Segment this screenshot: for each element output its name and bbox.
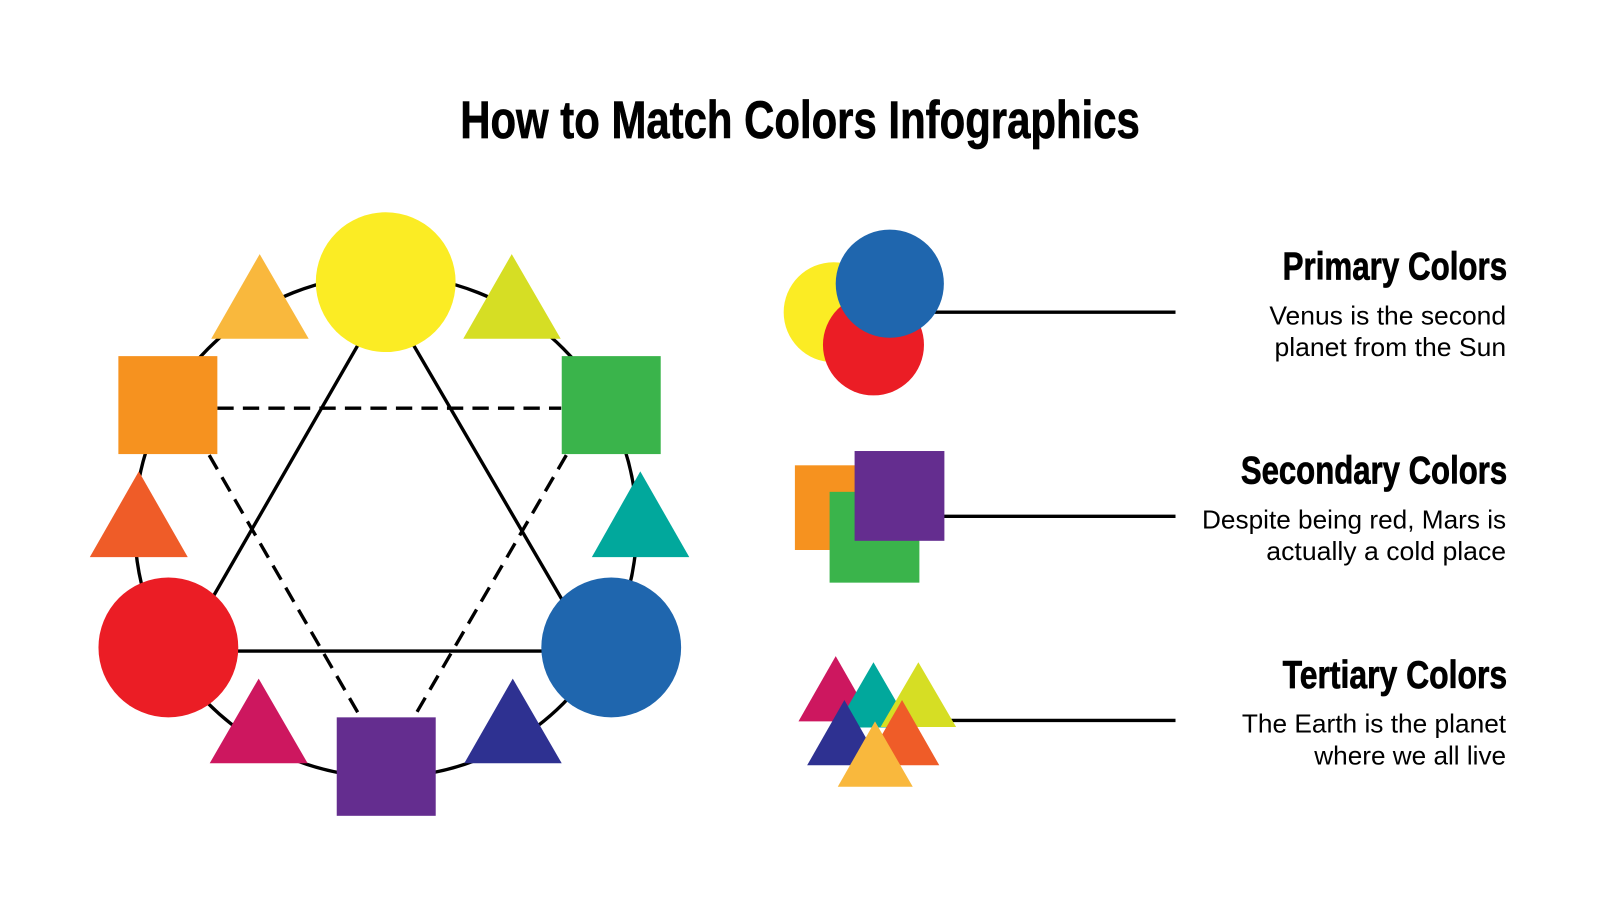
solid lines — [211, 343, 562, 651]
connector line — [939, 515, 1176, 518]
blue circle — [541, 578, 681, 717]
red circle — [98, 578, 238, 717]
navy triangle — [464, 679, 562, 763]
purple square — [337, 717, 436, 816]
yellow-green triangle — [463, 254, 561, 339]
description: Despite being red, Mars is — [1202, 507, 1506, 535]
row: secondary colors — [795, 450, 1507, 583]
magenta triangle — [210, 679, 308, 763]
row: primary colors — [784, 230, 1507, 395]
orange square — [118, 356, 217, 454]
icon: overlapping squares — [795, 451, 944, 583]
description — [1202, 507, 1506, 566]
description — [1242, 711, 1506, 770]
wheel ring — [135, 275, 637, 777]
heading: Tertiary Colors — [1283, 654, 1507, 697]
green square — [562, 356, 661, 454]
heading: Primary Colors — [1283, 246, 1507, 289]
connector line — [929, 311, 1176, 314]
description: where we all live — [1313, 742, 1506, 770]
red-orange triangle — [90, 471, 188, 557]
dashed lines — [209, 408, 566, 718]
yellow circle — [316, 212, 456, 352]
description — [1269, 302, 1506, 362]
connector line — [949, 719, 1176, 722]
heading: Secondary Colors — [1241, 450, 1507, 493]
teal triangle — [592, 471, 689, 557]
description: The Earth is the planet — [1242, 711, 1506, 739]
icon: overlapping triangles — [798, 656, 956, 787]
title: How to Match Colors Infographics — [460, 91, 1140, 150]
description: planet from the Sun — [1274, 334, 1506, 362]
icon: overlapping circles — [784, 230, 944, 395]
description: actually a cold place — [1266, 538, 1506, 566]
description: Venus is the second — [1269, 302, 1506, 330]
amber triangle — [211, 254, 309, 339]
row: tertiary colors — [798, 654, 1507, 787]
color wheel diagram — [90, 212, 689, 816]
